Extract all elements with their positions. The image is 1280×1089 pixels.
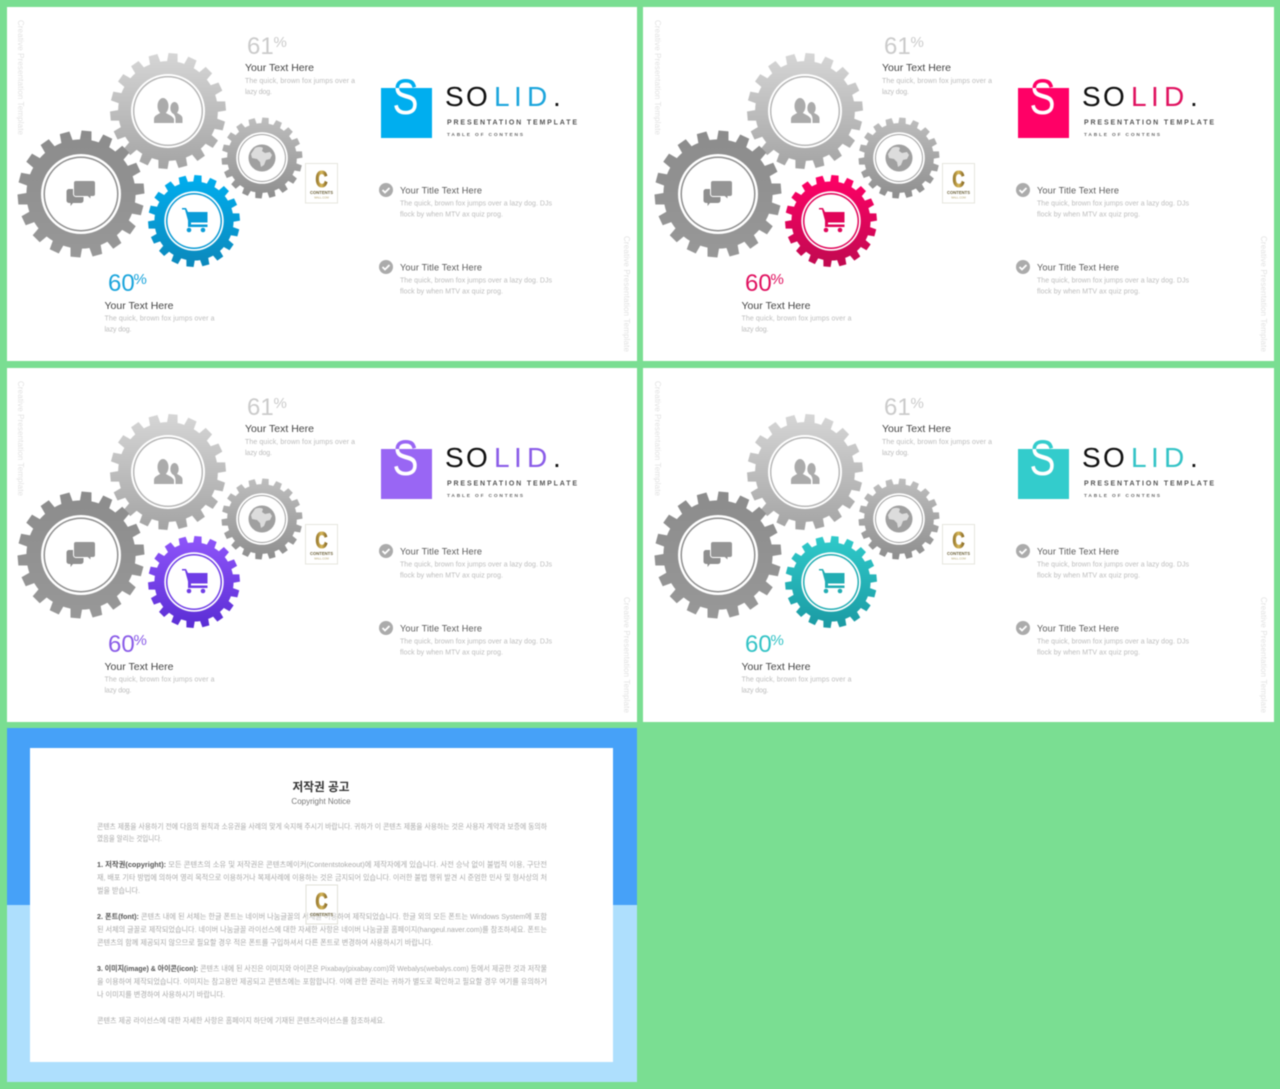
list item 1 (379, 544, 552, 580)
stat 61%: The quick, brown fox jumps over a (245, 78, 355, 85)
logo wordmark: L (1131, 81, 1147, 112)
stat 61%: 61 (884, 394, 911, 421)
logo wordmark (1082, 81, 1214, 138)
logo wordmark: S (445, 81, 464, 112)
gray gears (654, 414, 940, 618)
list item 1: flock by when MTV ax quiz prog. (1037, 572, 1140, 580)
stat 61%: The quick, brown fox jumps over a (882, 439, 992, 446)
list item 1: flock by when MTV ax quiz prog. (400, 572, 503, 580)
list item 2 (1016, 260, 1190, 296)
list item 2 (379, 621, 552, 656)
stamp logo: CONTENTS (947, 551, 970, 556)
stat 61% (245, 33, 355, 96)
stat 60% (742, 631, 852, 694)
stat 60%: % (770, 271, 784, 288)
logo wordmark: D (1164, 442, 1184, 473)
notice section 1: 벌을 받습니다. (97, 885, 140, 895)
logo mark (381, 69, 432, 138)
notice closing line: 콘텐츠 제공 라이선스에 대한 자세한 사항은 홈페이지 하단에 기재된 콘텐츠라이선스를 참조하세요. (97, 1015, 385, 1025)
stat 61%: 61 (884, 33, 911, 60)
stamp logo: CONTENTS (310, 551, 333, 556)
stat 61%: lazy dog. (245, 450, 272, 457)
list item 1: Your Title Text Here (1037, 186, 1119, 196)
notice section 1: 1. 저작권(copyright): 모든 콘텐츠의 소유 및 저작권은 콘텐츠메이커(Contentstokeout)에 제작자에게 있습니다. 사전 승낙 없이 불법적 이용, 구단전 (97, 859, 547, 869)
logo mark (1018, 430, 1069, 499)
notice section 1 (97, 859, 547, 895)
logo wordmark: TABLE OF CONTENS (1084, 493, 1161, 499)
stat 61%: lazy dog. (882, 89, 909, 96)
stat 61%: Your Text Here (882, 423, 951, 435)
list item 2: The quick, brown fox jumps over a lazy dog. DJs (1037, 278, 1190, 284)
logo wordmark: PRESENTATION TEMPLATE (1084, 480, 1214, 488)
side label left: Creative Presentation Template (653, 20, 662, 136)
logo wordmark: O (1103, 442, 1125, 473)
notice heading (291, 779, 351, 806)
stat 61%: The quick, brown fox jumps over a (882, 78, 992, 85)
side label left: Creative Presentation Template (16, 20, 25, 136)
list item 2: flock by when MTV ax quiz prog. (400, 288, 503, 296)
notice section 3: 을 이용하여 제작되었습니다. 이미지는 참고용만 제공되고 콘텐츠에는 포함합니다. 이에 관한 권리는 귀하가 별도로 확인하고 필요할 경우 여기를 유의하거 (97, 976, 547, 986)
list item 1: Your Title Text Here (1037, 546, 1119, 556)
side label right: Creative Presentation Template (622, 236, 631, 353)
side label left: Creative Presentation Template (653, 381, 662, 497)
logo mark (381, 430, 432, 499)
logo wordmark: . (1190, 442, 1198, 473)
logo mark: S (1030, 69, 1056, 125)
stat 61%: % (274, 395, 287, 412)
stat 61%: % (910, 395, 924, 412)
list item 2 (1016, 621, 1190, 656)
stamp logo (306, 885, 338, 924)
list item 1 (1016, 544, 1190, 580)
stat 61%: Your Text Here (245, 62, 314, 74)
logo wordmark: . (553, 81, 561, 112)
stat 60%: The quick, brown fox jumps over a (742, 676, 852, 684)
logo wordmark: O (466, 81, 488, 112)
notice section 3: 나 이미지를 변경하여 사용하시기 바랍니다. (97, 989, 225, 999)
logo wordmark: PRESENTATION TEMPLATE (447, 120, 577, 126)
notice section 2: 된 서체의 글꼴로 제작되었습니다. 네이버 나눔글꼴 라이선스에 대한 자세한 사항은 네이버 나눔글꼴 홈페이지(hangeul.naver.com)를 참조하세요. 폰트는 (97, 924, 547, 934)
logo wordmark (1082, 442, 1214, 499)
list item 2: flock by when MTV ax quiz prog. (1037, 650, 1140, 656)
gray gears (18, 414, 302, 618)
panel: slide pink (643, 7, 1274, 361)
notice intro (97, 821, 547, 843)
stat 61%: Your Text Here (882, 62, 951, 74)
stamp logo (306, 164, 338, 203)
list item 1: The quick, brown fox jumps over a lazy dog. DJs (400, 562, 552, 568)
notice heading: Copyright Notice (291, 797, 351, 806)
list item 2: The quick, brown fox jumps over a lazy dog. DJs (400, 278, 552, 284)
stat 60%: The quick, brown fox jumps over a (104, 676, 215, 684)
logo mark: S (1030, 430, 1056, 486)
logo wordmark: TABLE OF CONTENS (447, 493, 524, 499)
stat 60%: 60 (745, 270, 772, 297)
logo wordmark: . (553, 442, 561, 473)
list item 1: Your Title Text Here (400, 186, 482, 196)
side label left: Creative Presentation Template (16, 381, 25, 497)
list item 2: The quick, brown fox jumps over a lazy dog. DJs (400, 638, 552, 646)
logo wordmark: O (1103, 81, 1125, 112)
logo wordmark: S (1082, 442, 1101, 473)
stat 60%: % (770, 632, 784, 649)
stat 60%: Your Text Here (742, 300, 811, 312)
stamp logo: MALL.COM (314, 556, 329, 560)
logo mark: S (392, 430, 418, 486)
notice section 2: 2. 폰트(font): 콘텐츠 내에 된 서체는 한글 폰트는 네이버 나눔글꼴의 서체를 이용하여 제작되었습니다. 한글 외의 모든 폰트는 Windows System에 포함 (97, 911, 547, 921)
list item 2: Your Title Text Here (400, 262, 482, 272)
gray gears (18, 53, 302, 258)
stamp logo: CONTENTS (947, 190, 970, 195)
stat 60%: lazy dog. (104, 688, 132, 694)
side label right: Creative Presentation Template (1259, 597, 1268, 714)
stat 61%: 61 (247, 33, 274, 60)
panel: copyright notice (7, 728, 637, 1082)
logo wordmark: I (514, 442, 522, 473)
stat 60% (104, 631, 215, 694)
stat 60%: 60 (745, 631, 772, 658)
stamp logo: C (316, 527, 328, 553)
stat 60%: % (134, 271, 147, 288)
stat 61%: The quick, brown fox jumps over a (245, 439, 355, 446)
logo wordmark (445, 442, 577, 499)
stat 60%: Your Text Here (742, 661, 811, 673)
side label right: Creative Presentation Template (1259, 236, 1268, 353)
accent gear with cart (785, 175, 877, 267)
list item 1: The quick, brown fox jumps over a lazy dog. DJs (400, 200, 552, 208)
logo wordmark: L (494, 442, 510, 473)
list item 2: Your Title Text Here (1037, 262, 1119, 272)
logo wordmark: S (445, 442, 464, 473)
logo wordmark: I (514, 81, 522, 112)
list item 2: flock by when MTV ax quiz prog. (400, 650, 503, 656)
stamp logo: C (952, 527, 964, 553)
notice section 3 (97, 963, 547, 999)
stat 60%: lazy dog. (742, 326, 769, 334)
panel: slide purple (7, 368, 637, 722)
stamp logo: C (952, 166, 964, 192)
stat 60%: The quick, brown fox jumps over a (104, 316, 215, 322)
stamp logo: C (316, 888, 328, 914)
notice section 2 (97, 911, 547, 947)
side label right: Creative Presentation Template (622, 597, 631, 714)
stamp logo: C (316, 166, 328, 192)
stat 60%: 60 (108, 270, 135, 297)
logo wordmark (445, 81, 577, 138)
stamp logo: MALL.COM (951, 196, 966, 200)
gray gears (654, 53, 940, 258)
list item 1 (379, 183, 552, 218)
logo wordmark: . (1190, 81, 1198, 112)
stat 60%: Your Text Here (104, 300, 174, 312)
panel: slide teal (643, 368, 1274, 722)
logo mark: S (392, 69, 418, 125)
stat 60% (742, 270, 852, 334)
logo wordmark: D (527, 81, 547, 112)
logo mark: S (392, 69, 418, 125)
logo mark: S (1030, 430, 1056, 486)
stamp logo (306, 524, 338, 564)
logo wordmark: PRESENTATION TEMPLATE (447, 480, 577, 488)
list item 2: flock by when MTV ax quiz prog. (1037, 288, 1140, 296)
stat 61%: % (274, 34, 287, 51)
stat 60%: The quick, brown fox jumps over a (742, 316, 852, 322)
stamp logo (942, 524, 974, 564)
accent gear with cart (148, 536, 240, 628)
notice section 2: 콘텐츠의 함께 제공되지 않으므로 필요할 경우 적은 폰트를 구입하셔서 다른 폰트로 변경하여 사용하시기 바랍니다. (97, 937, 433, 947)
list item 1: Your Title Text Here (400, 546, 482, 556)
logo wordmark: D (1164, 81, 1184, 112)
logo wordmark: L (1131, 442, 1147, 473)
stamp logo: MALL.COM (314, 196, 329, 200)
stat 60%: lazy dog. (104, 326, 132, 334)
notice section 1: 재, 배포 기타 방법에 의하여 영리 목적으로 이용하거나 복제사례에 이용하는 것은 금지되어 있습니다. 이러한 불법 행위 발견 시 준엄한 민사 및 형사상의 처 (97, 872, 547, 882)
stat 61%: lazy dog. (882, 450, 909, 457)
stat 60%: % (134, 632, 147, 649)
logo wordmark: S (1082, 81, 1101, 112)
notice intro: 콘텐츠 제품을 사용하기 전에 다음의 원칙과 소유권을 사례의 맞게 숙지해 주시기 바랍니다. 귀하가 이 콘텐츠 제품을 사용하는 것은 사용자 계약과 보증에 동의하 (97, 821, 547, 831)
stamp logo: CONTENTS (310, 912, 333, 917)
logo wordmark: PRESENTATION TEMPLATE (1084, 120, 1214, 126)
stat 60%: Your Text Here (104, 661, 174, 673)
panel: slide blue (7, 7, 637, 361)
notice section 3: 3. 이미지(image) & 아이콘(icon): 콘텐츠 내에 된 사진은 이미지와 아이콘은 Pixabay(pixabay.com)와 Webalys(webalys.com) 등에서 제공한 것과 저작물 (97, 963, 547, 973)
logo wordmark: TABLE OF CONTENS (1084, 132, 1161, 138)
notice heading: 저작권 공고 (292, 779, 350, 794)
logo wordmark: L (494, 81, 510, 112)
logo mark: S (392, 430, 418, 486)
logo mark (1018, 69, 1069, 138)
accent gear with cart (785, 536, 877, 628)
notice intro: 였음을 알리는 것입니다. (97, 833, 162, 843)
stat 61% (882, 33, 992, 96)
list item 2: Your Title Text Here (400, 624, 482, 634)
list item 1: flock by when MTV ax quiz prog. (400, 212, 503, 218)
stat 61%: Your Text Here (245, 423, 314, 435)
list item 1: The quick, brown fox jumps over a lazy dog. DJs (1037, 200, 1190, 208)
stat 61%: 61 (247, 394, 274, 421)
stat 61%: lazy dog. (245, 89, 272, 96)
stat 61% (245, 394, 355, 457)
logo wordmark: D (527, 442, 547, 473)
logo wordmark: O (466, 442, 488, 473)
stat 60% (104, 270, 215, 334)
stamp logo: MALL.COM (951, 556, 966, 560)
list item 1 (1016, 183, 1190, 218)
list item 2: Your Title Text Here (1037, 624, 1119, 634)
logo wordmark: TABLE OF CONTENS (447, 132, 524, 138)
stat 60%: lazy dog. (742, 688, 769, 694)
logo wordmark: I (1151, 81, 1159, 112)
list item 1: The quick, brown fox jumps over a lazy dog. DJs (1037, 562, 1190, 568)
logo mark: S (1030, 69, 1056, 125)
list item 2 (379, 260, 552, 296)
list item 2: The quick, brown fox jumps over a lazy dog. DJs (1037, 638, 1190, 646)
list item 1: flock by when MTV ax quiz prog. (1037, 212, 1140, 218)
stat 61%: % (910, 34, 924, 51)
stamp logo: CONTENTS (310, 190, 333, 195)
logo wordmark: I (1151, 442, 1159, 473)
stat 60%: 60 (108, 631, 135, 658)
stat 61% (882, 394, 992, 457)
accent gear with cart (148, 175, 240, 267)
stamp logo (942, 164, 974, 203)
